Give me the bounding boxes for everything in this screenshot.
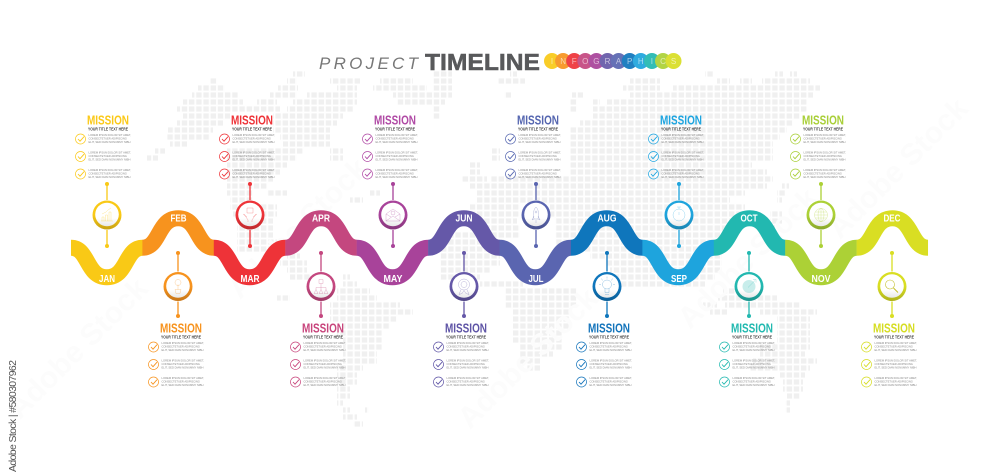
mission block: NOV: ELIT, SED DIAM NONUMMY NIBH <box>804 157 845 161</box>
title word: infographics in coloured circles: F <box>572 57 577 66</box>
mission block: DEC: CONSECTETUER ADIPISCING <box>874 344 913 348</box>
segment: OCT <box>714 218 785 248</box>
node: NOV globe icon <box>806 182 836 248</box>
title word: infographics in coloured circles: P <box>627 57 632 66</box>
mission block: MAY: LOREM IPSUM DOLOR SIT AMET, <box>376 133 418 137</box>
title word: project: PROJECT <box>319 54 420 73</box>
mission block: NOV: MISSION <box>802 114 844 128</box>
mission block: AUG: CONSECTETUER ADIPISCING <box>590 344 628 348</box>
title <box>319 49 682 75</box>
title word: infographics in coloured circles <box>544 53 682 69</box>
mission block: DEC <box>862 322 917 387</box>
mission block: AUG: ELIT, SED DIAM NONUMMY NIBH <box>590 365 631 369</box>
month labels: SEP <box>671 274 687 285</box>
mission block: DEC: LOREM IPSUM DOLOR SIT AMET, <box>874 376 917 380</box>
mission block: AUG: CONSECTETUER ADIPISCING <box>590 362 628 366</box>
mission block: JUN: CONSECTETUER ADIPISCING <box>446 344 485 348</box>
mission block: FEB: ELIT, SED DIAM NONUMMY NIBH <box>162 348 203 352</box>
segment: SEP <box>642 248 714 277</box>
title word: infographics in coloured circles: N <box>560 57 566 66</box>
month labels: DEC <box>884 214 900 224</box>
mission block: OCT: MISSION <box>731 322 773 336</box>
mission block: APR: ELIT, SED DIAM NONUMMY NIBH <box>304 348 345 352</box>
title word: infographics in coloured circles: I <box>551 57 553 66</box>
mission block: OCT: CONSECTETUER ADIPISCING <box>732 344 771 348</box>
node: OCT target icon <box>734 251 764 318</box>
mission block: JUL: CONSECTETUER ADIPISCING <box>518 136 557 140</box>
mission block: MAY: LOREM IPSUM DOLOR SIT AMET, <box>376 168 418 172</box>
mission block: APR: YOUR TITLE TEXT HERE <box>303 334 343 340</box>
side stock id: Adobe Stock | #580307962 <box>7 360 19 472</box>
mission block: MAR <box>220 114 275 179</box>
mission block: JUN: LOREM IPSUM DOLOR SIT AMET, <box>446 358 489 362</box>
mission block: JAN: MISSION <box>87 114 129 128</box>
mission block: SEP: ELIT, SED DIAM NONUMMY NIBH <box>662 175 703 179</box>
mission block: FEB: LOREM IPSUM DOLOR SIT AMET, <box>162 376 204 380</box>
mission block: MAY: ELIT, SED DIAM NONUMMY NIBH <box>376 140 417 144</box>
mission block: MAY: ELIT, SED DIAM NONUMMY NIBH <box>376 175 417 179</box>
mission block: NOV: LOREM IPSUM DOLOR SIT AMET, <box>804 133 846 137</box>
mission block: SEP: ELIT, SED DIAM NONUMMY NIBH <box>662 157 703 161</box>
mission block: DEC: LOREM IPSUM DOLOR SIT AMET, <box>874 358 917 362</box>
mission block: JUN: ELIT, SED DIAM NONUMMY NIBH <box>446 348 488 352</box>
mission block: OCT: CONSECTETUER ADIPISCING <box>732 379 771 383</box>
mission block: SEP: ELIT, SED DIAM NONUMMY NIBH <box>662 140 703 144</box>
title word: infographics in coloured circles: I <box>651 57 653 66</box>
mission block: JAN: ELIT, SED DIAM NONUMMY NIBH <box>88 140 130 144</box>
mission block: JUL: CONSECTETUER ADIPISCING <box>518 154 557 158</box>
segment: MAY <box>357 248 428 277</box>
watermark text: Adobe Stock <box>452 282 605 435</box>
mission block: JUN: CONSECTETUER ADIPISCING <box>446 379 485 383</box>
mission block: DEC: ELIT, SED DIAM NONUMMY NIBH <box>874 348 916 352</box>
segment: JUL <box>500 248 571 277</box>
node: DEC magnifier icon <box>878 251 906 318</box>
mission block: NOV: CONSECTETUER ADIPISCING <box>804 171 842 175</box>
mission block: JAN: YOUR TITLE TEXT HERE <box>88 126 128 132</box>
mission block: OCT: ELIT, SED DIAM NONUMMY NIBH <box>732 365 774 369</box>
dotted world map background <box>147 74 820 424</box>
node: JUN badge icon <box>450 251 478 318</box>
mission block: JUL: LOREM IPSUM DOLOR SIT AMET, <box>518 133 561 137</box>
title word: infographics in coloured circles: A <box>616 57 622 66</box>
mission block: MAR: LOREM IPSUM DOLOR SIT AMET, <box>232 150 275 154</box>
mission block: AUG: LOREM IPSUM DOLOR SIT AMET, <box>590 341 632 345</box>
node: MAR hands icon <box>236 182 264 248</box>
node: JUL rocket icon <box>522 182 550 248</box>
mission block: AUG: LOREM IPSUM DOLOR SIT AMET, <box>590 358 632 362</box>
mission block: APR: LOREM IPSUM DOLOR SIT AMET, <box>304 376 346 380</box>
mission block: MAR: CONSECTETUER ADIPISCING <box>232 154 271 158</box>
title word: infographics in coloured circles: S <box>671 57 676 66</box>
node: AUG bulb icon <box>592 251 622 318</box>
watermark text: Adobe Stock <box>222 152 375 305</box>
mission block: MAR: ELIT, SED DIAM NONUMMY NIBH <box>232 175 274 179</box>
mission block: MAR: YOUR TITLE TEXT HERE <box>232 126 272 132</box>
mission block: APR <box>290 322 346 387</box>
mission block: NOV: YOUR TITLE TEXT HERE <box>803 126 843 132</box>
mission block: AUG: ELIT, SED DIAM NONUMMY NIBH <box>590 348 631 352</box>
mission block: JAN <box>76 114 131 179</box>
mission block: NOV: LOREM IPSUM DOLOR SIT AMET, <box>804 150 846 154</box>
title word: infographics in coloured circles: G <box>593 57 600 66</box>
mission block: MAY: YOUR TITLE TEXT HERE <box>375 126 415 132</box>
mission block: AUG <box>576 322 632 387</box>
mission block: JUN: LOREM IPSUM DOLOR SIT AMET, <box>446 376 489 380</box>
mission block: APR: CONSECTETUER ADIPISCING <box>304 379 342 383</box>
mission block: MAR: CONSECTETUER ADIPISCING <box>232 171 271 175</box>
month labels: NOV <box>812 274 831 285</box>
mission block: FEB: ELIT, SED DIAM NONUMMY NIBH <box>162 383 203 387</box>
mission block: JAN: CONSECTETUER ADIPISCING <box>88 154 127 158</box>
mission block: MAY: LOREM IPSUM DOLOR SIT AMET, <box>376 150 418 154</box>
month labels: APR <box>312 214 331 224</box>
mission block: FEB: YOUR TITLE TEXT HERE <box>161 334 201 340</box>
mission block: JUL: ELIT, SED DIAM NONUMMY NIBH <box>518 140 560 144</box>
mission block: SEP: MISSION <box>660 114 702 128</box>
wave timeline <box>71 218 928 277</box>
segment: JAN <box>71 248 143 277</box>
node: APR org chart icon <box>306 251 336 318</box>
mission block: JUN <box>434 322 489 387</box>
month labels: MAY <box>384 274 403 285</box>
mission block: NOV: CONSECTETUER ADIPISCING <box>804 154 842 158</box>
mission block: JAN: LOREM IPSUM DOLOR SIT AMET, <box>88 168 131 172</box>
mission block: SEP: LOREM IPSUM DOLOR SIT AMET, <box>662 150 704 154</box>
mission block: OCT: YOUR TITLE TEXT HERE <box>732 334 772 340</box>
mission block: JUL: YOUR TITLE TEXT HERE <box>518 126 558 132</box>
mission block: JUN: LOREM IPSUM DOLOR SIT AMET, <box>446 341 489 345</box>
mission block: OCT: ELIT, SED DIAM NONUMMY NIBH <box>732 383 774 387</box>
node: JAN bars icon <box>92 182 122 248</box>
mission block: JUL: LOREM IPSUM DOLOR SIT AMET, <box>518 168 561 172</box>
segment: FEB <box>142 218 214 248</box>
mission block: FEB: MISSION <box>160 322 202 336</box>
mission block: MAY: CONSECTETUER ADIPISCING <box>376 136 414 140</box>
mission block: MAY <box>362 114 418 179</box>
mission block: JUN: ELIT, SED DIAM NONUMMY NIBH <box>446 383 488 387</box>
watermark text <box>2 92 975 435</box>
mission block: APR: LOREM IPSUM DOLOR SIT AMET, <box>304 358 346 362</box>
month labels: AUG <box>598 214 617 224</box>
mission block: MAR: ELIT, SED DIAM NONUMMY NIBH <box>232 157 274 161</box>
mission block: JUL: ELIT, SED DIAM NONUMMY NIBH <box>518 175 560 179</box>
mission block: DEC: CONSECTETUER ADIPISCING <box>874 362 913 366</box>
mission block: NOV: ELIT, SED DIAM NONUMMY NIBH <box>804 175 845 179</box>
mission block: JUL: MISSION <box>517 114 559 128</box>
mission block: SEP: CONSECTETUER ADIPISCING <box>662 171 700 175</box>
mission block: JUL <box>506 114 561 179</box>
mission block: AUG: CONSECTETUER ADIPISCING <box>590 379 628 383</box>
mission block: SEP: LOREM IPSUM DOLOR SIT AMET, <box>662 168 704 172</box>
mission block: JAN: ELIT, SED DIAM NONUMMY NIBH <box>88 175 130 179</box>
mission block: JUL: ELIT, SED DIAM NONUMMY NIBH <box>518 157 560 161</box>
segment: DEC <box>857 218 928 248</box>
segment: NOV <box>785 248 857 277</box>
mission block: JAN: CONSECTETUER ADIPISCING <box>88 171 127 175</box>
mission block: MAR: LOREM IPSUM DOLOR SIT AMET, <box>232 168 275 172</box>
mission block: JUN: MISSION <box>445 322 487 336</box>
node: MAY envelope icon <box>378 182 408 248</box>
mission block: JAN: ELIT, SED DIAM NONUMMY NIBH <box>88 157 130 161</box>
mission block: JUN: CONSECTETUER ADIPISCING <box>446 362 485 366</box>
mission block: MAR: MISSION <box>231 114 273 128</box>
mission block: FEB: ELIT, SED DIAM NONUMMY NIBH <box>162 365 203 369</box>
month labels: OCT <box>740 214 758 224</box>
mission block: JUL: LOREM IPSUM DOLOR SIT AMET, <box>518 150 561 154</box>
mission block: MAY: CONSECTETUER ADIPISCING <box>376 171 414 175</box>
mission block: AUG: LOREM IPSUM DOLOR SIT AMET, <box>590 376 632 380</box>
month labels: JAN <box>99 274 115 285</box>
mission block: FEB: CONSECTETUER ADIPISCING <box>162 344 200 348</box>
mission block: SEP <box>648 114 704 179</box>
mission block: FEB: CONSECTETUER ADIPISCING <box>162 362 200 366</box>
watermark text: Adobe Stock <box>822 92 975 245</box>
mission block: JUN: ELIT, SED DIAM NONUMMY NIBH <box>446 365 488 369</box>
mission block: MAY: ELIT, SED DIAM NONUMMY NIBH <box>376 157 417 161</box>
mission block: NOV <box>790 114 846 179</box>
month labels: FEB <box>170 214 186 224</box>
mission block: JAN: LOREM IPSUM DOLOR SIT AMET, <box>88 150 131 154</box>
mission block: OCT: LOREM IPSUM DOLOR SIT AMET, <box>732 341 775 345</box>
mission block: DEC: MISSION <box>873 322 915 336</box>
mission block: AUG: ELIT, SED DIAM NONUMMY NIBH <box>590 383 631 387</box>
title word: infographics in coloured circles: C <box>660 57 666 66</box>
mission block: OCT: ELIT, SED DIAM NONUMMY NIBH <box>732 348 774 352</box>
mission block: NOV: CONSECTETUER ADIPISCING <box>804 136 842 140</box>
mission block: OCT: CONSECTETUER ADIPISCING <box>732 362 771 366</box>
mission block: FEB: LOREM IPSUM DOLOR SIT AMET, <box>162 358 204 362</box>
title word: infographics in coloured circles: R <box>605 57 611 66</box>
mission block: DEC: ELIT, SED DIAM NONUMMY NIBH <box>874 383 916 387</box>
segment: APR <box>285 218 357 248</box>
mission block: APR: ELIT, SED DIAM NONUMMY NIBH <box>304 383 345 387</box>
mission block: JUN: YOUR TITLE TEXT HERE <box>446 334 486 340</box>
mission block: MAY: CONSECTETUER ADIPISCING <box>376 154 414 158</box>
mission block: APR: MISSION <box>302 322 344 336</box>
mission block: APR: LOREM IPSUM DOLOR SIT AMET, <box>304 341 346 345</box>
title word: infographics in coloured circles: H <box>638 57 644 66</box>
title word: timeline: TIMELINE <box>425 49 540 75</box>
mission block: APR: ELIT, SED DIAM NONUMMY NIBH <box>304 365 345 369</box>
mission block: NOV: LOREM IPSUM DOLOR SIT AMET, <box>804 168 846 172</box>
mission block: SEP: CONSECTETUER ADIPISCING <box>662 154 700 158</box>
month labels <box>99 214 900 285</box>
mission block: APR: CONSECTETUER ADIPISCING <box>304 362 342 366</box>
mission block: MAY: MISSION <box>374 114 416 128</box>
mission block: MAR: ELIT, SED DIAM NONUMMY NIBH <box>232 140 274 144</box>
watermark text: Adobe Stock <box>672 182 825 335</box>
node: FEB plant icon <box>164 251 192 318</box>
mission block: SEP: YOUR TITLE TEXT HERE <box>661 126 701 132</box>
month labels: JUN <box>456 214 472 224</box>
mission block: OCT: LOREM IPSUM DOLOR SIT AMET, <box>732 358 775 362</box>
mission block: FEB <box>148 322 204 387</box>
segment: MAR <box>214 248 285 277</box>
node: SEP stopwatch icon <box>664 182 694 248</box>
mission block: AUG: YOUR TITLE TEXT HERE <box>589 334 629 340</box>
segment: JUN <box>428 218 500 248</box>
mission block: AUG: MISSION <box>588 322 630 336</box>
mission block: DEC: ELIT, SED DIAM NONUMMY NIBH <box>874 365 916 369</box>
mission block: MAR: CONSECTETUER ADIPISCING <box>232 136 271 140</box>
mission block: DEC: YOUR TITLE TEXT HERE <box>874 334 914 340</box>
mission block: JAN: CONSECTETUER ADIPISCING <box>88 136 127 140</box>
title word: infographics in coloured circles: O <box>582 57 588 66</box>
mission block: SEP: LOREM IPSUM DOLOR SIT AMET, <box>662 133 704 137</box>
mission block: DEC: LOREM IPSUM DOLOR SIT AMET, <box>874 341 917 345</box>
month labels: MAR <box>240 274 260 285</box>
mission block: FEB: LOREM IPSUM DOLOR SIT AMET, <box>162 341 204 345</box>
segment: AUG <box>571 218 643 248</box>
mission block: APR: CONSECTETUER ADIPISCING <box>304 344 342 348</box>
mission block: OCT: LOREM IPSUM DOLOR SIT AMET, <box>732 376 775 380</box>
mission block: MAR: LOREM IPSUM DOLOR SIT AMET, <box>232 133 275 137</box>
mission block: DEC: CONSECTETUER ADIPISCING <box>874 379 913 383</box>
mission block: OCT <box>720 322 775 387</box>
mission block: FEB: CONSECTETUER ADIPISCING <box>162 379 200 383</box>
mission block: SEP: CONSECTETUER ADIPISCING <box>662 136 700 140</box>
watermark text: Adobe Stock <box>2 272 155 425</box>
mission block: NOV: ELIT, SED DIAM NONUMMY NIBH <box>804 140 845 144</box>
month labels: JUL <box>528 274 544 285</box>
mission block: JUL: CONSECTETUER ADIPISCING <box>518 171 557 175</box>
mission block: JAN: LOREM IPSUM DOLOR SIT AMET, <box>88 133 131 137</box>
